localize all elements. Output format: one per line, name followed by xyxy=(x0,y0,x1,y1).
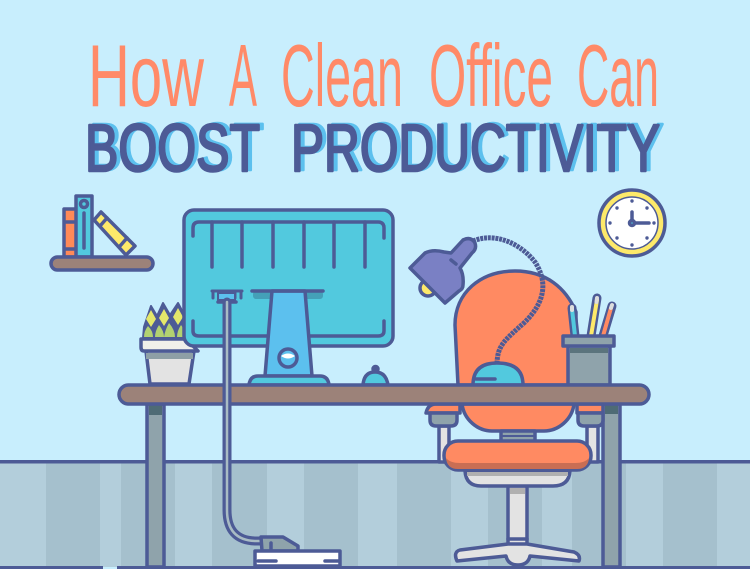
icon: wall clock xyxy=(599,190,665,256)
chair base and column xyxy=(508,486,527,546)
chair seat xyxy=(444,441,591,470)
chair backrest lower xyxy=(462,404,574,431)
monitor stand xyxy=(265,291,312,376)
title: How A Clean Office Can: Office xyxy=(429,26,553,125)
title: Boost Productivity: BOOST xyxy=(89,110,264,185)
chair arms xyxy=(439,426,598,462)
title: How A Clean Office Can: How xyxy=(88,26,204,125)
title: Boost Productivity xyxy=(85,110,664,186)
monitor xyxy=(184,210,393,385)
icon: desk bell xyxy=(363,366,388,385)
monitor vents xyxy=(193,222,384,336)
title: How A Clean Office Can: Can xyxy=(577,26,659,125)
title: How A Clean Office Can: Clean xyxy=(281,26,403,125)
floor: striped wainscot xyxy=(0,460,750,569)
chair back xyxy=(455,271,576,385)
computer tower plug and box xyxy=(255,537,340,566)
icon: potted plant xyxy=(141,303,198,384)
desk top xyxy=(119,385,649,404)
icon: bookshelf xyxy=(51,196,153,270)
office chair xyxy=(426,404,603,565)
title: Boost Productivity: BOOST xyxy=(85,111,260,186)
title: How A Clean Office Can: A xyxy=(229,26,257,125)
icon: desk lamp xyxy=(410,238,543,385)
chair seat pan xyxy=(465,471,570,486)
desk legs xyxy=(147,404,620,567)
icon: pencil holder xyxy=(563,298,614,385)
monitor cable connector xyxy=(212,291,242,298)
monitor cable xyxy=(227,302,262,541)
title: How A Clean Office Can xyxy=(88,26,659,125)
